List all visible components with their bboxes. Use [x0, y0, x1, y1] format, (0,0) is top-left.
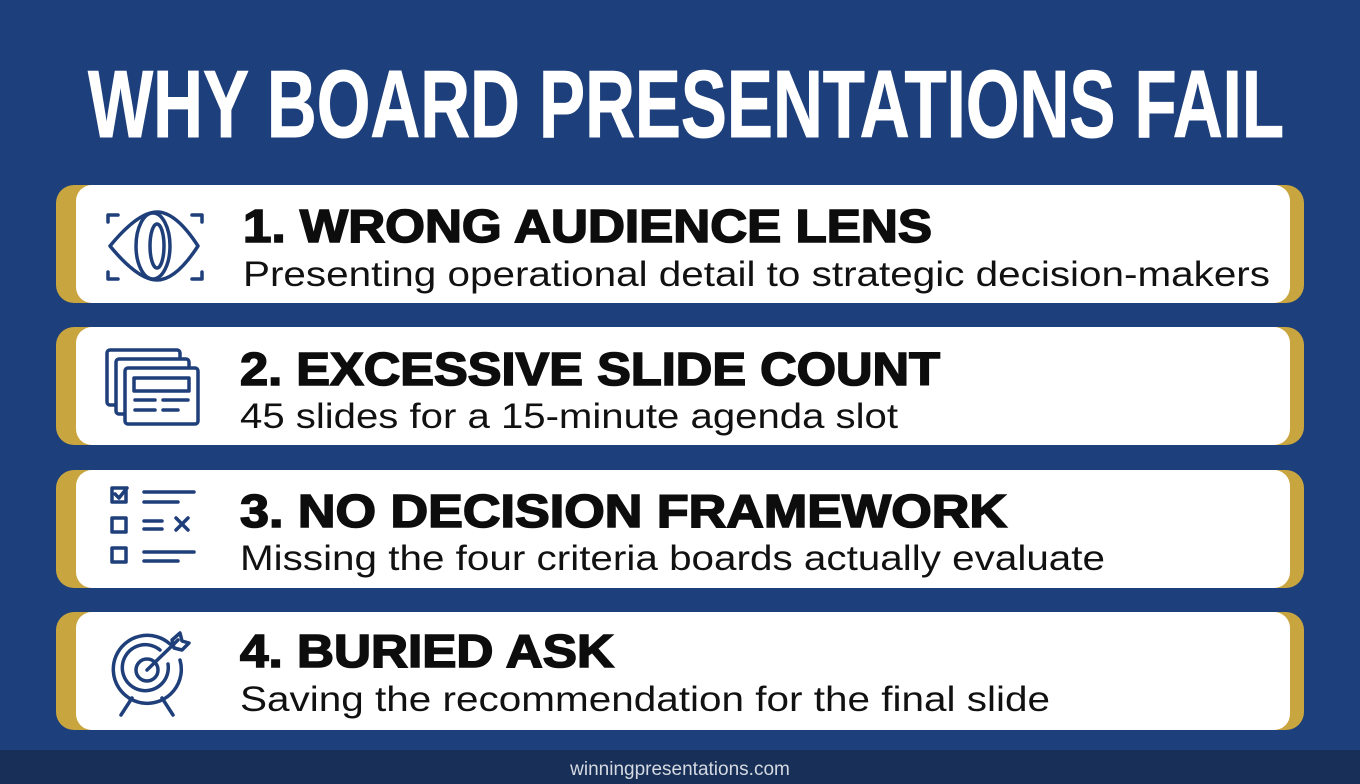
icon: slides — [107, 350, 198, 424]
panel: card 1 — [56, 185, 1304, 303]
heading 2: 2. EXCESSIVE SLIDE COUNT — [240, 343, 940, 395]
text 1: Presenting operational detail to strategic decision-makers — [243, 255, 1270, 294]
icon: eye — [108, 212, 202, 280]
heading 4: 4. BURIED ASK — [240, 625, 614, 677]
text 3: Missing the four criteria boards actually evaluate — [240, 539, 1105, 578]
icon: target — [113, 633, 189, 715]
panel: card 4 — [56, 612, 1304, 730]
heading 1: 1. WRONG AUDIENCE LENS — [243, 200, 932, 252]
text 4: Saving the recommendation for the final slide — [240, 680, 1050, 719]
footer: winningpresentations.com — [569, 759, 790, 780]
panel: card 3 — [56, 470, 1304, 588]
footer — [0, 750, 1360, 784]
icon: checklist — [112, 488, 194, 562]
panel: card 2 — [56, 327, 1304, 445]
heading 3: 3. NO DECISION FRAMEWORK — [240, 485, 1007, 537]
text 2: 45 slides for a 15-minute agenda slot — [240, 397, 898, 436]
